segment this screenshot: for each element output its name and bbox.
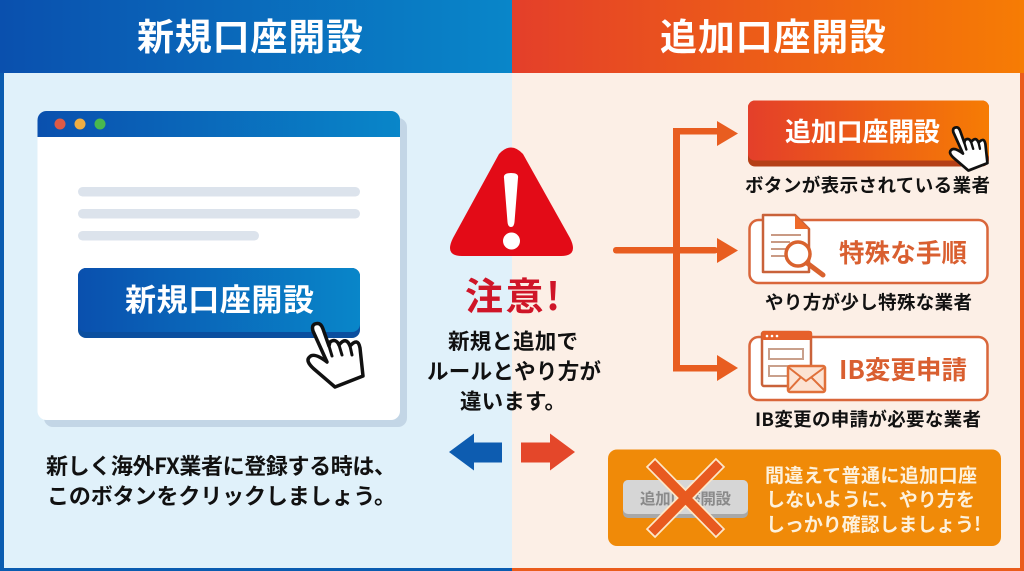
card: 特殊な手順: 特殊な手順 bbox=[839, 233, 967, 270]
text block: warning message: ルールとやり方が bbox=[427, 355, 601, 386]
icon: window and envelope bbox=[762, 331, 825, 392]
disabled button bbox=[623, 480, 748, 518]
button: 追加口座開設 bbox=[748, 100, 989, 171]
panel: left background bbox=[0, 0, 512, 571]
placeholder text lines bbox=[78, 187, 360, 240]
arrow: blue left bbox=[449, 434, 502, 470]
browser window illustration bbox=[38, 111, 407, 427]
text block: warning message: 新規と追加で bbox=[448, 325, 578, 356]
text block: warning message: 違います。 bbox=[460, 385, 566, 416]
text block: left instruction: このボタンをクリックしましょう。 bbox=[47, 479, 396, 511]
caption: special procedure: やり方が少し特殊な業者 bbox=[765, 289, 972, 315]
caption: button shown: ボタンが表示されている業者 bbox=[745, 172, 990, 198]
warning text: しっかり確認しましょう! bbox=[766, 510, 981, 537]
button: 新規口座開設 bbox=[78, 268, 360, 338]
card: IB変更申請: IB変更申請 bbox=[839, 350, 967, 387]
text block: warning message bbox=[427, 325, 601, 416]
text block: left instruction bbox=[46, 449, 396, 511]
icon: pointer hand small bbox=[950, 127, 987, 171]
text block: left instruction: 新しく海外FX業者に登録する時は、 bbox=[46, 449, 396, 481]
button: 追加口座開設: 追加口座開設 bbox=[785, 112, 940, 149]
caption: IB change: IB変更の申請が必要な業者 bbox=[755, 406, 981, 432]
header: left bbox=[0, 0, 512, 73]
arrow: orange right bbox=[521, 434, 575, 470]
panel: right background bbox=[512, 0, 1024, 571]
warning text: 間違えて普通に追加口座 bbox=[765, 461, 977, 488]
warning text bbox=[765, 461, 981, 537]
card: IB変更申請 bbox=[750, 331, 988, 400]
warning text: しないように、やり方を bbox=[766, 485, 975, 512]
window dots bbox=[54, 118, 106, 130]
icon: warning triangle bbox=[450, 148, 573, 256]
card: 特殊な手順 bbox=[750, 215, 988, 283]
panel: bottom warning bbox=[608, 450, 1001, 546]
title: 新規口座開設: 新規口座開設 bbox=[137, 7, 363, 61]
title: 追加口座開設: 追加口座開設 bbox=[660, 7, 886, 61]
icon: document and magnifier bbox=[763, 215, 823, 275]
heading: 注意!: 注意! bbox=[465, 266, 560, 321]
arrows: branching connector bbox=[613, 121, 738, 381]
icon: cross mark bbox=[655, 467, 716, 529]
icon: pointer hand bbox=[308, 323, 363, 387]
button: 新規口座開設: 新規口座開設 bbox=[125, 275, 314, 320]
disabled button: 追加口座開設 bbox=[640, 487, 731, 509]
icon: exclamation mark bbox=[503, 173, 520, 250]
browser title bar bbox=[38, 111, 400, 137]
header: right bbox=[512, 0, 1024, 73]
